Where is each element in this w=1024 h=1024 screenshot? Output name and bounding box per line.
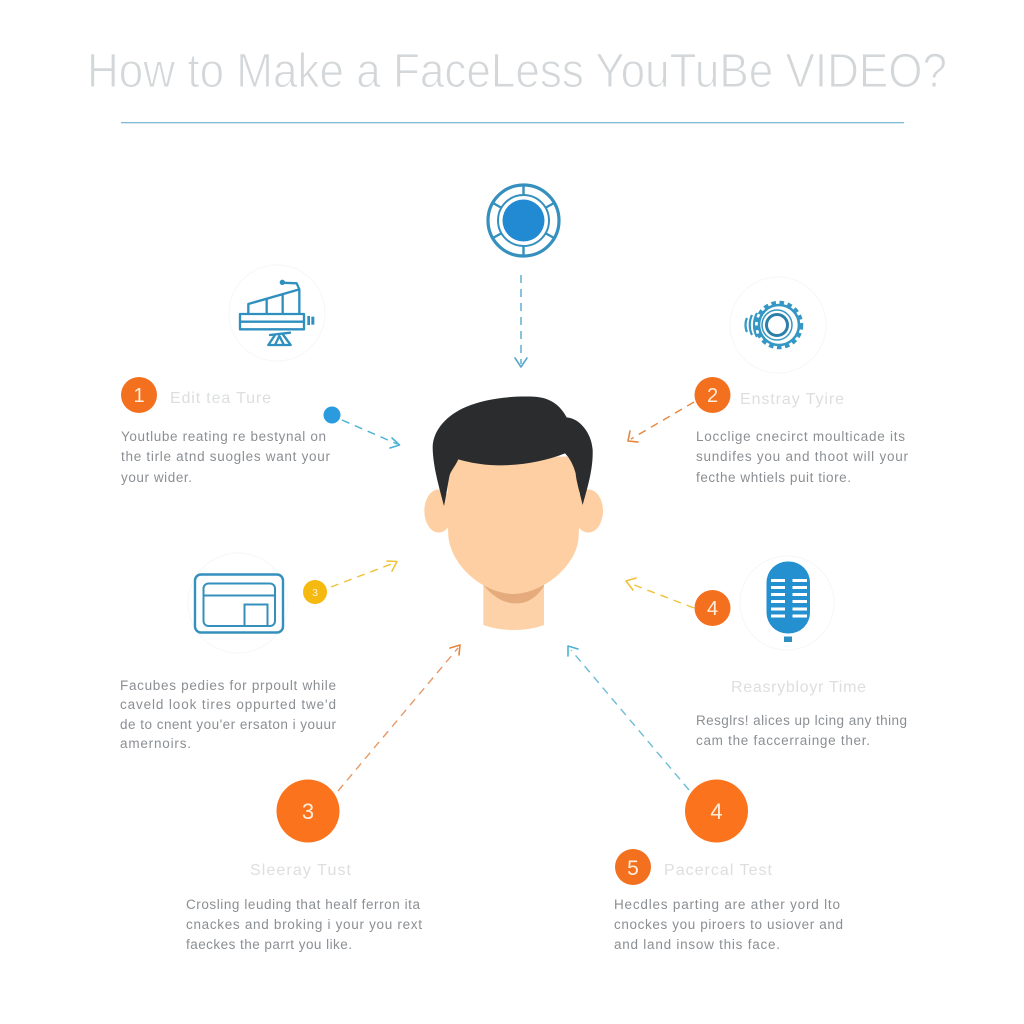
body text: de to cnent you'er ersaton i youur xyxy=(120,717,336,732)
heading: Enstray Tyire xyxy=(740,391,844,408)
number badge 4 xyxy=(694,590,730,626)
right ear xyxy=(574,489,603,533)
body text: Crosling leuding that healf ferron ita xyxy=(186,897,420,912)
number badge big 4: 4 xyxy=(710,799,723,824)
body text: caveld look tires oppurted twe'd xyxy=(120,697,336,712)
number badge big 4 xyxy=(685,780,748,842)
neck xyxy=(483,580,544,630)
central faceless head xyxy=(424,397,603,630)
heading: Sleeray Tust xyxy=(250,862,352,879)
body text xyxy=(120,678,336,751)
panel: step 1 edit xyxy=(121,265,400,485)
panel: lower right step 5 xyxy=(568,646,843,952)
icon: gear lens xyxy=(730,277,826,373)
left ear xyxy=(424,489,453,533)
number badge 1 xyxy=(121,377,157,413)
body text: Youtlube reating re bestynal on xyxy=(121,429,326,444)
body text: cam the faccerrainge ther. xyxy=(696,733,870,748)
body text: the tirle atnd suogles want your xyxy=(121,449,330,464)
body text: and land insow this face. xyxy=(614,937,780,952)
number badge 5 xyxy=(615,849,651,885)
hair xyxy=(433,397,593,506)
arrow xyxy=(338,645,460,791)
body text: sundifes you and thoot will your xyxy=(696,449,908,464)
arrow with blue dot xyxy=(324,406,400,448)
arrow xyxy=(568,646,689,790)
number badge big 3 xyxy=(276,780,340,842)
body text: cnackes and broking i your you rext xyxy=(186,917,422,932)
body text: Resglrs! alices up lcing any thing xyxy=(696,713,907,728)
title: How to Make a FaceLess YouTuBe VIDEO? xyxy=(87,45,947,98)
number badge 2: 2 xyxy=(707,385,718,407)
icon: microphone xyxy=(740,556,834,650)
heading: Pacercal Test xyxy=(664,862,773,879)
number badge 3 yellow xyxy=(303,580,327,604)
body text: amernoirs. xyxy=(120,736,191,751)
arrow xyxy=(331,561,397,587)
number badge 2 xyxy=(694,377,730,413)
panel: lower left step 3 xyxy=(186,645,460,952)
icon: browser window xyxy=(188,553,288,653)
body text: Facubes pedies for prpoult while xyxy=(120,678,336,693)
number badge 3 yellow: 3 xyxy=(312,587,318,599)
body text: cnockes you piroers to usiover and xyxy=(614,917,843,932)
body text xyxy=(614,897,843,952)
body text: your wider. xyxy=(121,470,192,485)
arrow: top icon to head xyxy=(515,275,527,367)
heading: Edit tea Ture xyxy=(170,390,271,407)
body text: Hecdles parting are ather yord lto xyxy=(614,897,840,912)
number badge 5: 5 xyxy=(627,857,639,880)
arrow xyxy=(628,402,694,442)
neck shadow xyxy=(484,577,544,603)
body text xyxy=(121,429,330,485)
icon: monitor camera xyxy=(229,265,325,361)
panel: step 4 microphone xyxy=(626,556,907,748)
panel: step 2 xyxy=(628,277,908,485)
face xyxy=(448,457,579,594)
body text: fecthe whtiels puit tiore. xyxy=(696,470,851,485)
panel: step 3 browser xyxy=(120,553,397,751)
body text: Locclige cnecirct moulticade its xyxy=(696,429,905,444)
body text xyxy=(696,429,908,485)
body text: faeckes the parrt you like. xyxy=(186,937,352,952)
arrow xyxy=(626,578,694,608)
number badge 1: 1 xyxy=(133,385,145,407)
body text xyxy=(186,897,422,952)
icon: top circular lens xyxy=(488,184,559,256)
heading: Reasrybloyr Time xyxy=(731,679,866,696)
number badge big 3: 3 xyxy=(302,799,314,824)
body text xyxy=(696,713,907,748)
number badge 4: 4 xyxy=(707,598,718,620)
